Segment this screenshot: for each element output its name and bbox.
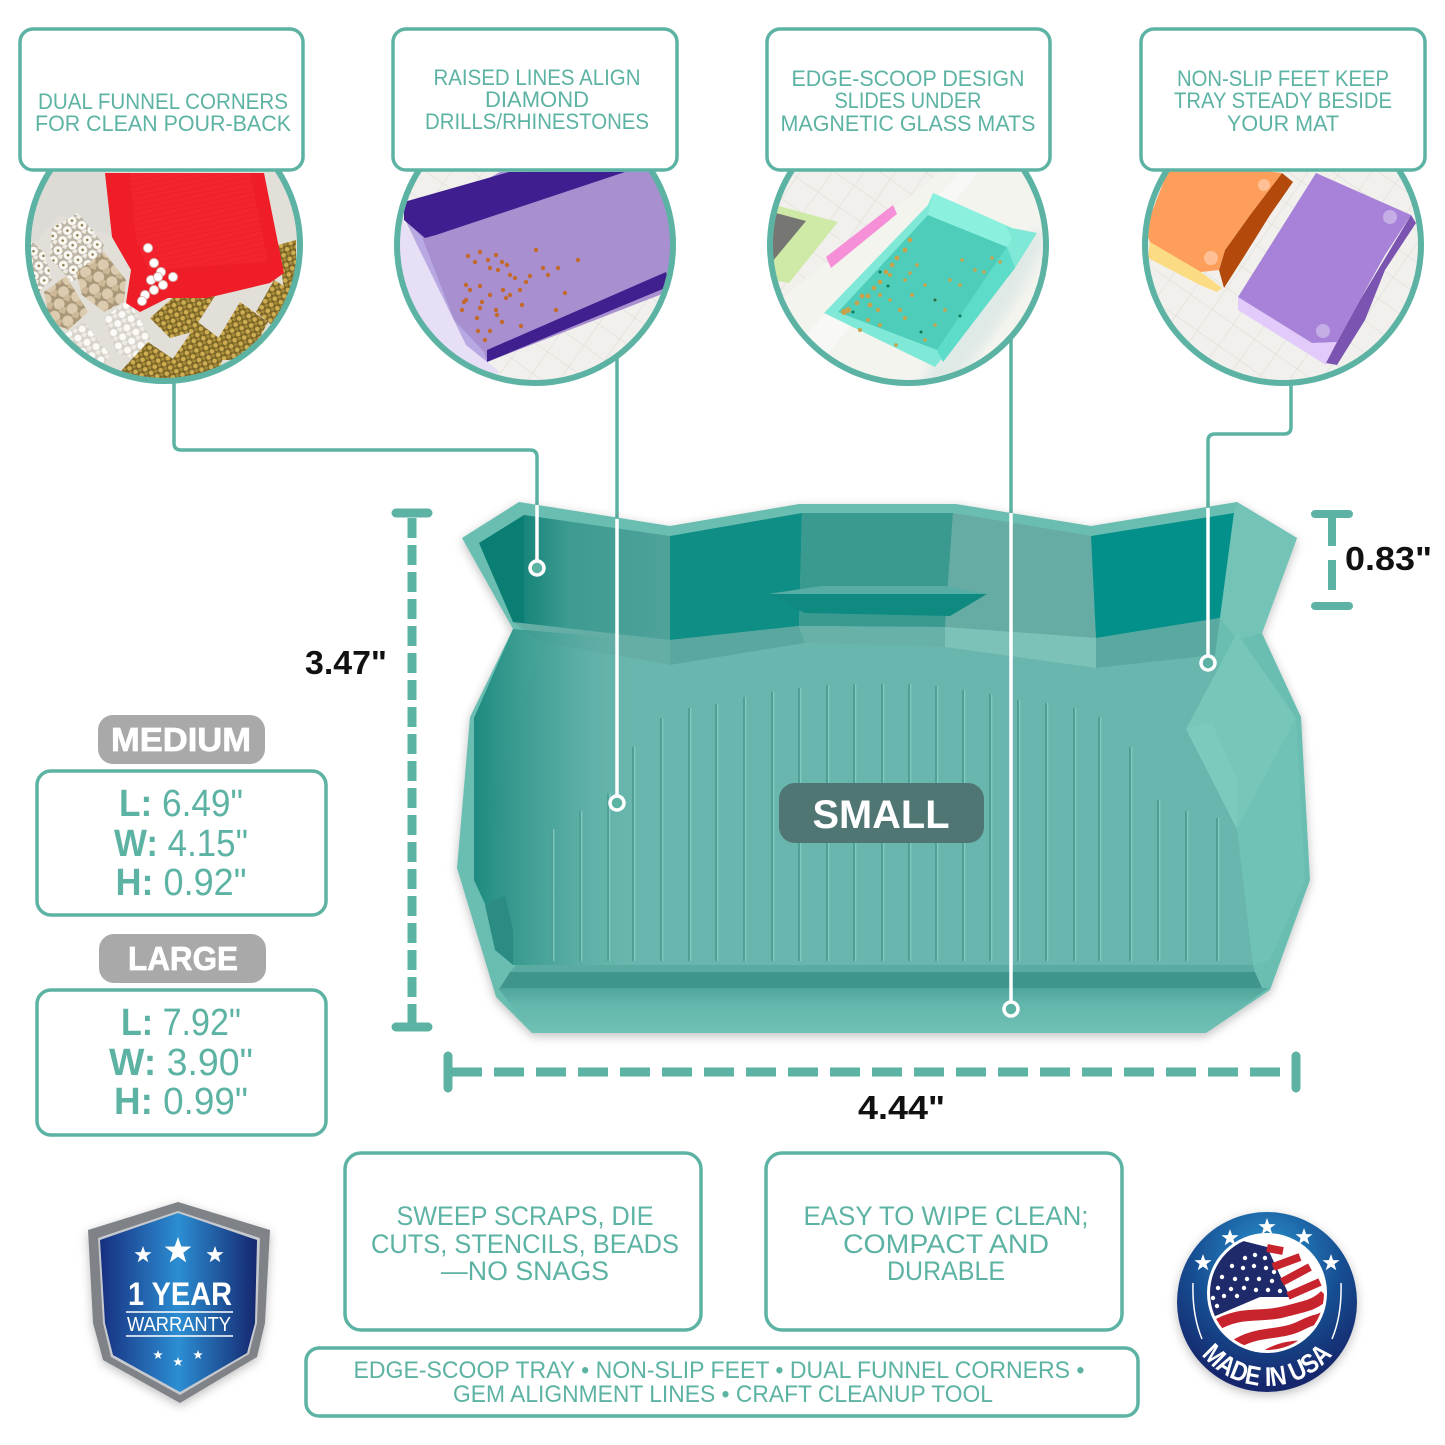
photo circle: red tray pouring beads <box>25 172 303 384</box>
large dimensions panel: W: 3.90" <box>109 1042 253 1084</box>
photo circle: purple tray with gems <box>394 172 676 386</box>
connector: raised lines to tray <box>615 358 619 520</box>
callout: raised lines: DIAMOND <box>485 87 589 112</box>
white callout leads and anchor rings <box>530 505 1215 1016</box>
badge: made in USA <box>1172 1210 1362 1400</box>
callout: non-slip feet: TRAY STEADY BESIDE <box>1174 88 1392 113</box>
callout: non-slip feet: NON-SLIP FEET KEEP <box>1177 66 1389 91</box>
large dimensions panel <box>37 990 326 1135</box>
tray right upper corner <box>1220 502 1297 640</box>
benefit box: easy to wipe clean: DURABLE <box>887 1256 1005 1286</box>
callout: edge scoop: EDGE-SCOOP DESIGN <box>792 66 1024 91</box>
benefit box: sweep scraps <box>345 1153 701 1330</box>
large dimensions panel: H: 0.99" <box>114 1081 248 1123</box>
callout: dual funnel corners: FOR CLEAN POUR-BACK <box>35 111 291 136</box>
connector: funnel corners to tray <box>174 383 537 506</box>
tray back ledge <box>768 586 987 616</box>
large dimensions panel: L: 7.92" <box>121 1002 241 1044</box>
tray right funnel facet <box>1186 633 1305 965</box>
photo circle: orange and purple trays on feet <box>1142 172 1424 386</box>
callout: dual funnel corners <box>20 29 303 170</box>
teal tray product <box>457 502 1310 1033</box>
dimension: tray height 0.83 <box>1315 514 1432 606</box>
badge: 1 year warranty: 1 YEAR <box>128 1276 232 1312</box>
keyword strip: GEM ALIGNMENT LINES • CRAFT CLEANUP TOOL <box>453 1381 993 1408</box>
tray left corner notch <box>485 895 513 965</box>
dimension: tray height 0.83: 0.83" <box>1345 540 1432 577</box>
keyword strip <box>306 1348 1138 1416</box>
callout: edge scoop: SLIDES UNDER <box>834 88 982 113</box>
tray bottom rim <box>498 965 1268 1033</box>
benefit box: easy to wipe clean: EASY TO WIPE CLEAN; <box>804 1201 1088 1231</box>
medium dimensions panel: L: 6.49" <box>119 783 243 825</box>
size label: medium: MEDIUM <box>111 721 251 758</box>
photo circle: teal tray on glass mat <box>767 172 1049 386</box>
tray lower wall band <box>513 618 1220 668</box>
medium dimensions panel: H: 0.92" <box>116 862 246 904</box>
size label: large: LARGE <box>128 940 238 977</box>
tray floor <box>492 642 1253 965</box>
dimension: tray width 4.44 <box>448 1056 1296 1126</box>
badge: 1 year warranty <box>88 1202 270 1403</box>
connector: non-slip feet to tray <box>1208 383 1291 508</box>
size label: small: SMALL <box>812 793 950 837</box>
callout: non-slip feet: YOUR MAT <box>1227 111 1339 136</box>
callout: dual funnel corners: DUAL FUNNEL CORNERS <box>38 89 288 114</box>
benefit box: easy to wipe clean <box>766 1153 1122 1330</box>
size label: large <box>99 934 266 983</box>
size label: medium <box>98 715 265 764</box>
medium dimensions panel: W: 4.15" <box>114 823 248 865</box>
callout: edge scoop <box>767 29 1050 170</box>
callout: raised lines <box>393 29 677 170</box>
callout: raised lines: DRILLS/RHINESTONES <box>425 109 649 134</box>
badge: 1 year warranty: WARRANTY <box>127 1314 231 1336</box>
tray left shadow <box>474 629 640 965</box>
benefit box: sweep scraps: CUTS, STENCILS, BEADS <box>371 1229 679 1259</box>
size label: small <box>779 783 984 843</box>
tray back wall <box>479 513 1234 640</box>
badge: made in USA: MADE IN USA <box>1202 1342 1332 1386</box>
dimension: tray width 4.44: 4.44" <box>858 1089 945 1126</box>
tray alignment ridges <box>552 684 1219 961</box>
benefit box: sweep scraps: —NO SNAGS <box>441 1256 609 1286</box>
medium dimensions panel <box>37 771 326 915</box>
dimension: tray length 3.47: 3.47" <box>305 644 387 681</box>
keyword strip: EDGE-SCOOP TRAY • NON-SLIP FEET • DUAL FUNNEL CORNERS • <box>354 1357 1084 1384</box>
benefit box: easy to wipe clean: COMPACT AND <box>843 1229 1049 1259</box>
benefit box: sweep scraps: SWEEP SCRAPS, DIE <box>396 1201 654 1231</box>
dimension: tray length 3.47 <box>305 513 428 1027</box>
callout: edge scoop: MAGNETIC GLASS MATS <box>780 111 1036 136</box>
callout: raised lines: RAISED LINES ALIGN <box>434 65 640 90</box>
connector: edge scoop to tray <box>1009 338 1013 514</box>
callout: non-slip feet <box>1141 29 1425 170</box>
